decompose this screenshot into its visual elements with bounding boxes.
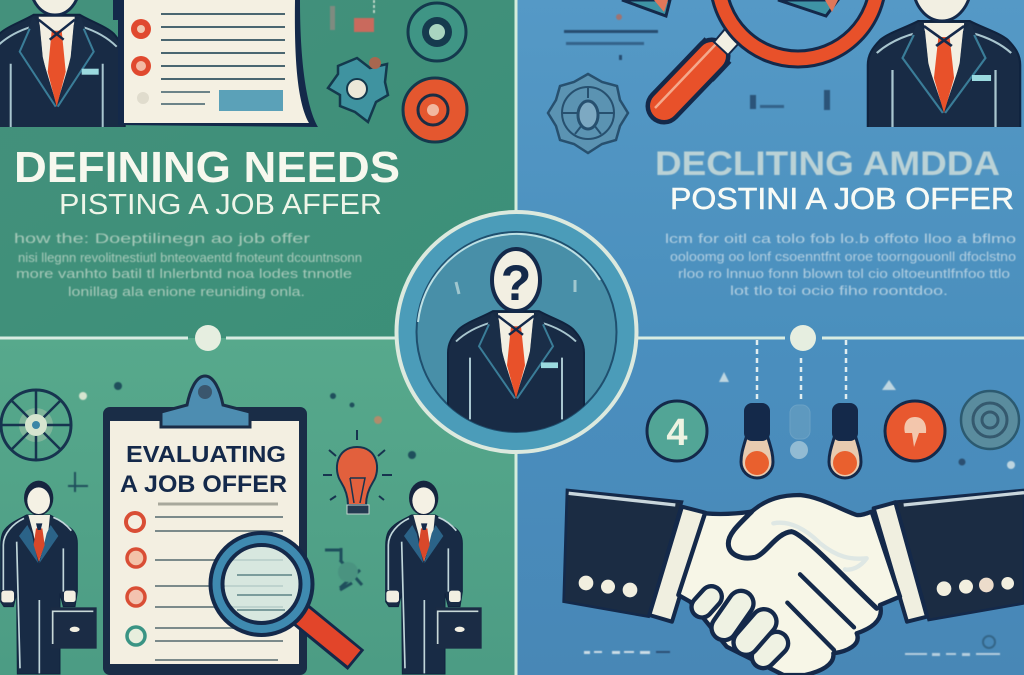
panel: bottom left green background (0, 338, 516, 675)
icon: teal badge (408, 3, 466, 61)
panel: bottom right blue background (516, 338, 1024, 675)
icon: teal badge with number: 4 (666, 412, 688, 454)
central circle: anonymous candidate (396, 212, 636, 452)
clipboard title: A JOB OFFER (120, 471, 287, 498)
figure: left businessman with briefcase (1, 481, 97, 674)
panel: top left green background (0, 0, 516, 338)
central head with question mark (492, 249, 540, 311)
icon: teal badge with number (647, 401, 707, 461)
clipboard title: EVALUATING (126, 441, 286, 467)
central head with question mark: ? (501, 255, 531, 311)
clipboard checklist (126, 504, 283, 660)
icon: grey blue badge (961, 391, 1019, 449)
text block: right description: ooloomg oo lonf csoenntfnt oroe toorngouonll dfoclstno (670, 250, 1016, 264)
connector dot: left (195, 325, 221, 351)
heading: defining needs: DEFINING NEEDS (14, 143, 400, 192)
document: top left job sheet (113, 0, 318, 127)
dashed hanging lines (757, 340, 846, 402)
clipboard clip (161, 376, 250, 427)
figure: top left businessman (0, 0, 126, 127)
icon: network wheel (1, 390, 71, 460)
figure: top right businessman (866, 0, 1022, 127)
clasped hands (678, 495, 900, 675)
figure: right businessman with briefcase (386, 481, 482, 674)
magnifying glass: bottom left (216, 539, 356, 660)
icon: top right cog (548, 74, 628, 153)
icon: faint specks (330, 0, 374, 32)
text block: left description (14, 230, 362, 299)
central suit (448, 311, 584, 446)
subheading: posting a job offer right: POSTINI A JOB OFFER (670, 181, 1014, 216)
panel: top right blue background (516, 0, 1024, 338)
icon: red badge (885, 401, 945, 461)
connector dot: right (790, 325, 816, 351)
handshake (564, 490, 1024, 675)
heading: right faded heading: DECLITING AMDDA (655, 145, 1000, 183)
icon: lightbulb (323, 430, 392, 514)
caption: faint left handshake marks (584, 651, 670, 654)
clipboard title (120, 441, 287, 498)
clipboard: evaluating a job offer (103, 376, 356, 675)
icon: gear (328, 57, 388, 122)
text block: left description: more vanhto batil tl lnlerbntd noa lodes tnnotle (16, 267, 352, 281)
icon: red badge (403, 78, 467, 142)
magnifying glass: top right (622, 0, 878, 108)
text block: left description: how the: Doeptilinegn ao job offer (14, 230, 310, 246)
text block: right description: lcm for oitl ca tolo fob lo.b offoto lloo a bflmo (665, 231, 1016, 246)
text block: right description: lot tlo toi ocio fiho roontdoo. (730, 284, 948, 298)
text block: left description: nisi llegnn revolitnestiutl bnteovaentd fnoteunt dcountnsonn (18, 251, 362, 265)
icon: faint bulb centre (790, 405, 810, 459)
icon: faint green molecule (68, 382, 416, 590)
icon: bulb left (741, 403, 773, 478)
caption: faint right handshake marks (905, 636, 1000, 656)
text block: right description: rloo ro lnnuo fonn blown tol cio oltoeuntlfnfoo ttlo (678, 267, 1010, 281)
subheading: posting a job offer left: PISTING A JOB AFFER (59, 189, 382, 221)
faint specks around badges (719, 372, 1015, 469)
icon: bulb right (829, 403, 861, 478)
text block: left description: lonillag ala enione reuniding onla. (68, 285, 305, 299)
text block: right description (665, 231, 1016, 298)
icon: top right faint marks (564, 14, 830, 110)
sleeves and cuffs (564, 490, 1024, 622)
